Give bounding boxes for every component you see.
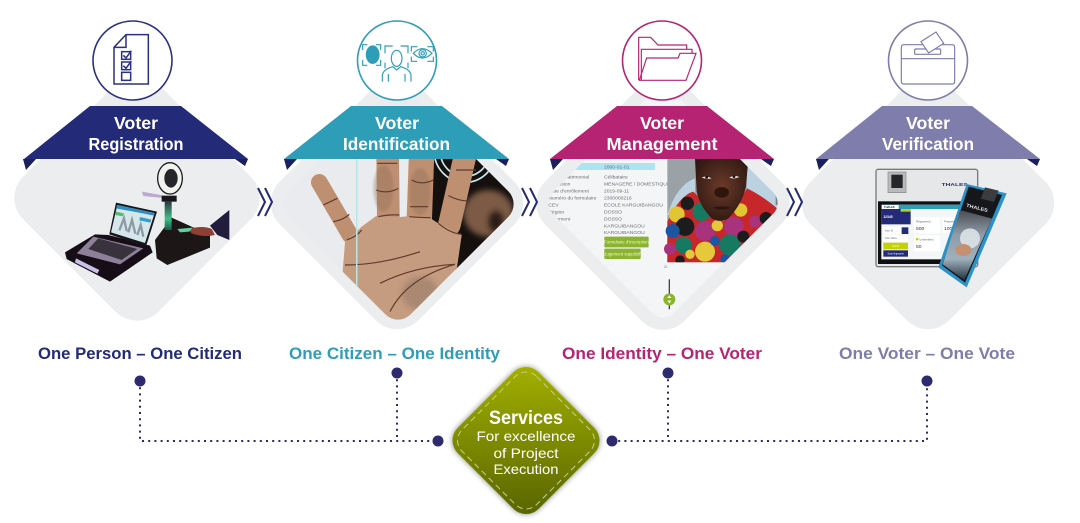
banner: voter verification: Voter xyxy=(906,113,950,133)
photo: voter record: KARGUIBANGOU xyxy=(604,223,645,229)
banner: voter identification: Identification xyxy=(343,134,450,154)
banner: voter registration: Registration xyxy=(88,134,184,154)
icon: ballot checklist xyxy=(93,21,172,100)
photo: voter record: Formulaire d'inscription xyxy=(604,240,649,245)
services heading: Services xyxy=(489,408,563,429)
photo: voter record: 2300000216 xyxy=(604,196,632,202)
photo: voter record: Numéro du formulaire xyxy=(548,196,597,202)
panel: voter registration xyxy=(2,21,272,333)
photo: verification devices: THALES xyxy=(884,205,895,209)
services description: of Project xyxy=(494,445,559,461)
photo: voter record: ECOLE KARGUIBANGOU xyxy=(604,203,663,209)
photo: voter record: 2000-01-01 xyxy=(604,164,630,170)
banner: voter verification: Verification xyxy=(882,134,974,154)
banner: voter management xyxy=(550,106,774,159)
services description: For excellence xyxy=(476,428,576,444)
connectors: right dotted lines to services xyxy=(606,368,932,446)
arrow fold: identification right xyxy=(496,159,509,166)
photo: voter record: KARGUIBANGOU xyxy=(604,230,645,236)
photo: voter record: Jugement supplétif xyxy=(604,252,641,257)
tagline: one person one citizen: One Person – One Citizen xyxy=(38,344,242,363)
panel: voter identification xyxy=(271,20,523,329)
photo: verification devices: 100 xyxy=(944,226,953,232)
photo: voter record: Région xyxy=(548,210,564,216)
photo: palm scan xyxy=(311,159,514,320)
photo: verification devices: THALES xyxy=(966,203,988,213)
diamond background: registration xyxy=(2,63,272,333)
photo: verification devices: 500 xyxy=(916,226,925,232)
tagline: one voter one vote: One Voter – One Vote xyxy=(839,344,1015,363)
arrow fold: registration left xyxy=(23,159,36,170)
photo: verification devices: THALES xyxy=(942,182,969,188)
banner: voter management: Voter xyxy=(640,113,684,133)
photo: voter record: ession xyxy=(556,182,571,188)
banner: voter identification: Voter xyxy=(375,113,419,133)
banner: voter registration xyxy=(24,106,248,159)
banner: voter identification xyxy=(284,106,509,159)
arrow: identification to management xyxy=(522,188,537,216)
arrow fold: management left xyxy=(550,159,563,170)
services description xyxy=(476,428,576,477)
photo: voter record: 2019-09-11 xyxy=(604,189,629,195)
icon: folder xyxy=(622,21,702,100)
arrow fold: verification left xyxy=(816,159,829,170)
tagline: one citizen one identity: One Citizen – One Identity xyxy=(289,344,501,363)
photo: voter record: ZOOM : 100% xyxy=(664,265,688,269)
photo: voter record: Date d'enrôlement xyxy=(548,189,590,195)
photo: verification devices: 50 xyxy=(916,244,922,250)
banner: voter registration: Voter xyxy=(114,113,158,133)
photo: verification devices xyxy=(876,169,1007,287)
photo: voter record: tement xyxy=(555,216,571,222)
icon: biometric identification xyxy=(358,21,436,100)
panel: services xyxy=(445,359,607,522)
services dashed outline xyxy=(451,366,601,515)
arrow fold: management right xyxy=(761,159,774,166)
photo: voter record: Célibataire xyxy=(604,175,628,181)
panel: voter verification xyxy=(789,21,1067,342)
photo: registration kit xyxy=(65,163,229,282)
photo: voter record: Matrimonial xyxy=(563,175,589,181)
photo: verification devices: Scan fingerprint xyxy=(888,253,904,256)
services diamond xyxy=(445,359,607,522)
photo: verification devices: Search xyxy=(892,245,900,248)
photo: verification devices: 12345 xyxy=(883,215,893,219)
photo: voter record: CEV xyxy=(548,203,559,209)
icon: ballot box xyxy=(888,21,968,100)
photo: verification devices: Voter ID xyxy=(885,230,893,233)
arrow fold: verification right xyxy=(1027,159,1040,166)
arrow: registration to identification xyxy=(258,188,272,216)
arrow fold: registration right xyxy=(235,159,248,166)
photo: voter record: DOSSO xyxy=(604,216,622,222)
connectors: left dotted lines to services xyxy=(134,368,444,446)
panel: voter management xyxy=(536,20,790,330)
photo: verification devices: Unidentified xyxy=(919,237,934,241)
photo: voter record xyxy=(548,159,778,310)
photo: verification devices: Prepared xyxy=(944,220,957,224)
tagline: one identity one voter: One Identity – One Voter xyxy=(562,344,762,363)
diamond background: verification xyxy=(789,64,1067,342)
photo: voter record: MENAGERE / DOMESTIQUE xyxy=(604,182,671,188)
banner: voter verification xyxy=(816,106,1040,159)
photo: verification devices: Registered xyxy=(916,220,931,224)
banner: voter management: Management xyxy=(606,134,718,154)
arrow: management to verification xyxy=(787,188,802,216)
services description: Execution xyxy=(494,461,558,477)
photo: voter record: DOSSO xyxy=(604,210,622,216)
diamond background: management xyxy=(524,64,802,342)
arrow fold: identification left xyxy=(284,159,297,170)
diamond background: identification xyxy=(258,64,536,342)
photo: verification devices: Voter Name xyxy=(885,237,898,240)
